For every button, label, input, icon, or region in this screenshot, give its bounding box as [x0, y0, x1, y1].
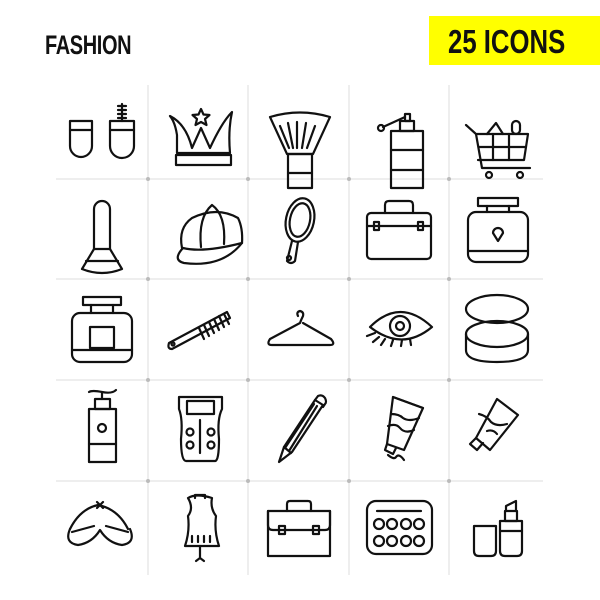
icon: briefcase [268, 501, 330, 556]
icon: vanity case [367, 201, 431, 259]
icon: eye [367, 312, 432, 346]
icon: makeup brush [270, 112, 330, 188]
icon: spray bottle [378, 114, 423, 188]
icon: cream tube [470, 399, 518, 450]
icon: eyeshadow tray [367, 501, 432, 554]
icon: comb [168, 312, 230, 349]
icon: bra [68, 502, 132, 545]
icon: lipstick and bottle [474, 501, 522, 556]
icon: pencil [279, 395, 326, 462]
icon: shopping cart [466, 121, 530, 178]
icon: cream jar [468, 198, 528, 262]
title: FASHION [45, 30, 131, 60]
icon: pump bottle [89, 390, 116, 462]
icon: crown [170, 109, 232, 165]
icon: lipstick cone [82, 201, 122, 273]
icon: cap [178, 205, 242, 264]
icon: compact powder [466, 295, 528, 362]
icon: paint tube [385, 397, 423, 460]
icon: eyeshadow palette [179, 397, 222, 461]
icon: hanger [268, 311, 333, 345]
icon: perfume jar [72, 297, 132, 362]
badge: 25 icons: 25 ICONS [448, 23, 565, 60]
icon: mannequin [185, 495, 219, 561]
icon: hand mirror [282, 196, 318, 263]
icon: nail polish [70, 104, 134, 158]
badge: 25 icons [429, 16, 600, 65]
